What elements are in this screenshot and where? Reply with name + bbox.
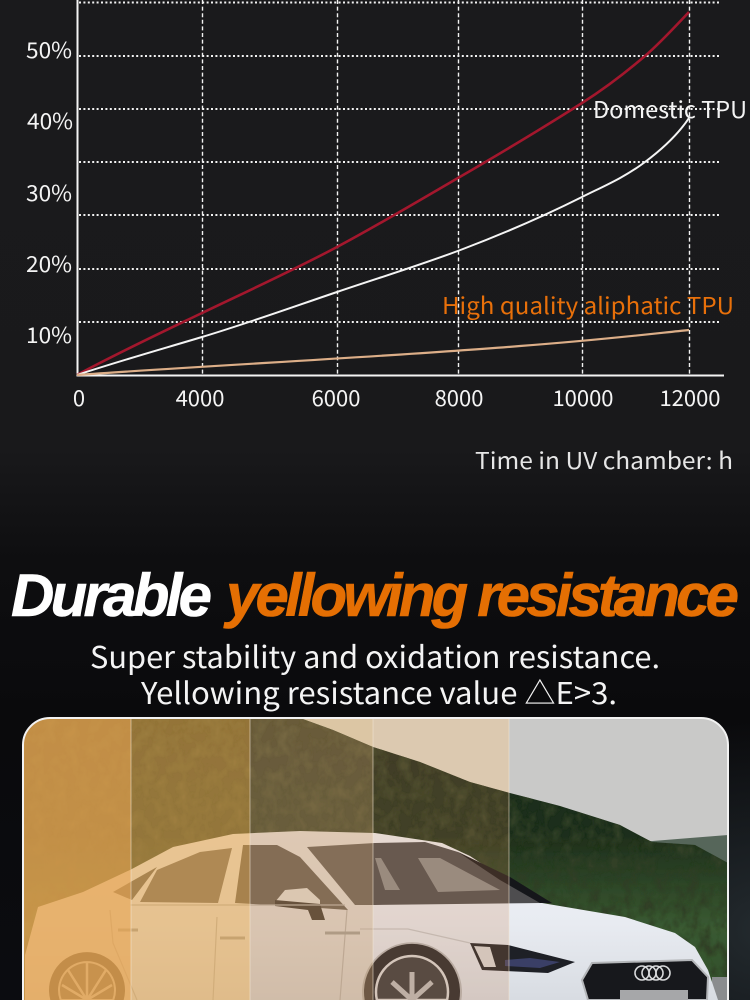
strip dividers (131, 718, 509, 1000)
door lines and handles (110, 905, 470, 1000)
chart grid lines (79, 0, 721, 375)
photo: white car (25, 831, 718, 1000)
subtitle (90, 633, 660, 713)
label: high quality aliphatic TPU: High quality aliphatic TPU (442, 287, 734, 321)
photo: distant hill (650, 835, 727, 862)
yellow tint strips over forest (23, 718, 509, 1000)
x axis labels: 12000 (659, 381, 721, 413)
x axis labels: 4000 (176, 381, 224, 413)
title: yellowing resistance (223, 562, 739, 629)
rear side window (140, 848, 232, 903)
y axis labels: 20% (26, 247, 72, 279)
subtitle: Super stability and oxidation resistance. (90, 633, 660, 677)
x axis labels: 8000 (435, 381, 483, 413)
rear wheel (49, 952, 125, 1000)
photo: forest (23, 718, 728, 1000)
side mirror (275, 888, 325, 920)
headlight (470, 943, 575, 973)
curve: high quality aliphatic TPU (77, 330, 689, 375)
y axis labels: 30% (26, 176, 72, 208)
windshield highlight (375, 858, 500, 892)
x axis labels: 10000 (552, 381, 614, 413)
photo panel: car yellowing comparison (23, 718, 728, 1000)
photo: road (712, 977, 728, 1000)
y axis labels: 50% (26, 33, 72, 65)
audi rings (635, 966, 670, 980)
y axis labels: 40% (27, 104, 73, 136)
x axis labels (73, 381, 721, 413)
subtitle: Yellowing resistance value △E>3. (140, 669, 617, 713)
wiper cowl (458, 852, 552, 903)
chart axes (78, 0, 724, 376)
curve: red material (77, 12, 689, 375)
front wheel (362, 942, 462, 1000)
front side window (235, 845, 348, 910)
x axis labels: 0 (73, 381, 85, 413)
line chart (26, 0, 747, 476)
title: Durable (11, 562, 212, 629)
y axis labels: 10% (26, 318, 72, 350)
curve: domestic TPU (77, 118, 689, 375)
x axis labels: 6000 (312, 381, 360, 413)
car body (25, 831, 718, 1000)
label: domestic TPU: Domestic TPU (593, 91, 747, 125)
photo: sky per strip (303, 719, 727, 842)
panel border (23, 718, 728, 1000)
rear quarter window (113, 867, 157, 900)
x axis title: Time in UV chamber: h (475, 442, 733, 476)
windshield (307, 842, 542, 905)
y axis labels (26, 33, 73, 350)
front grille (582, 960, 708, 1000)
